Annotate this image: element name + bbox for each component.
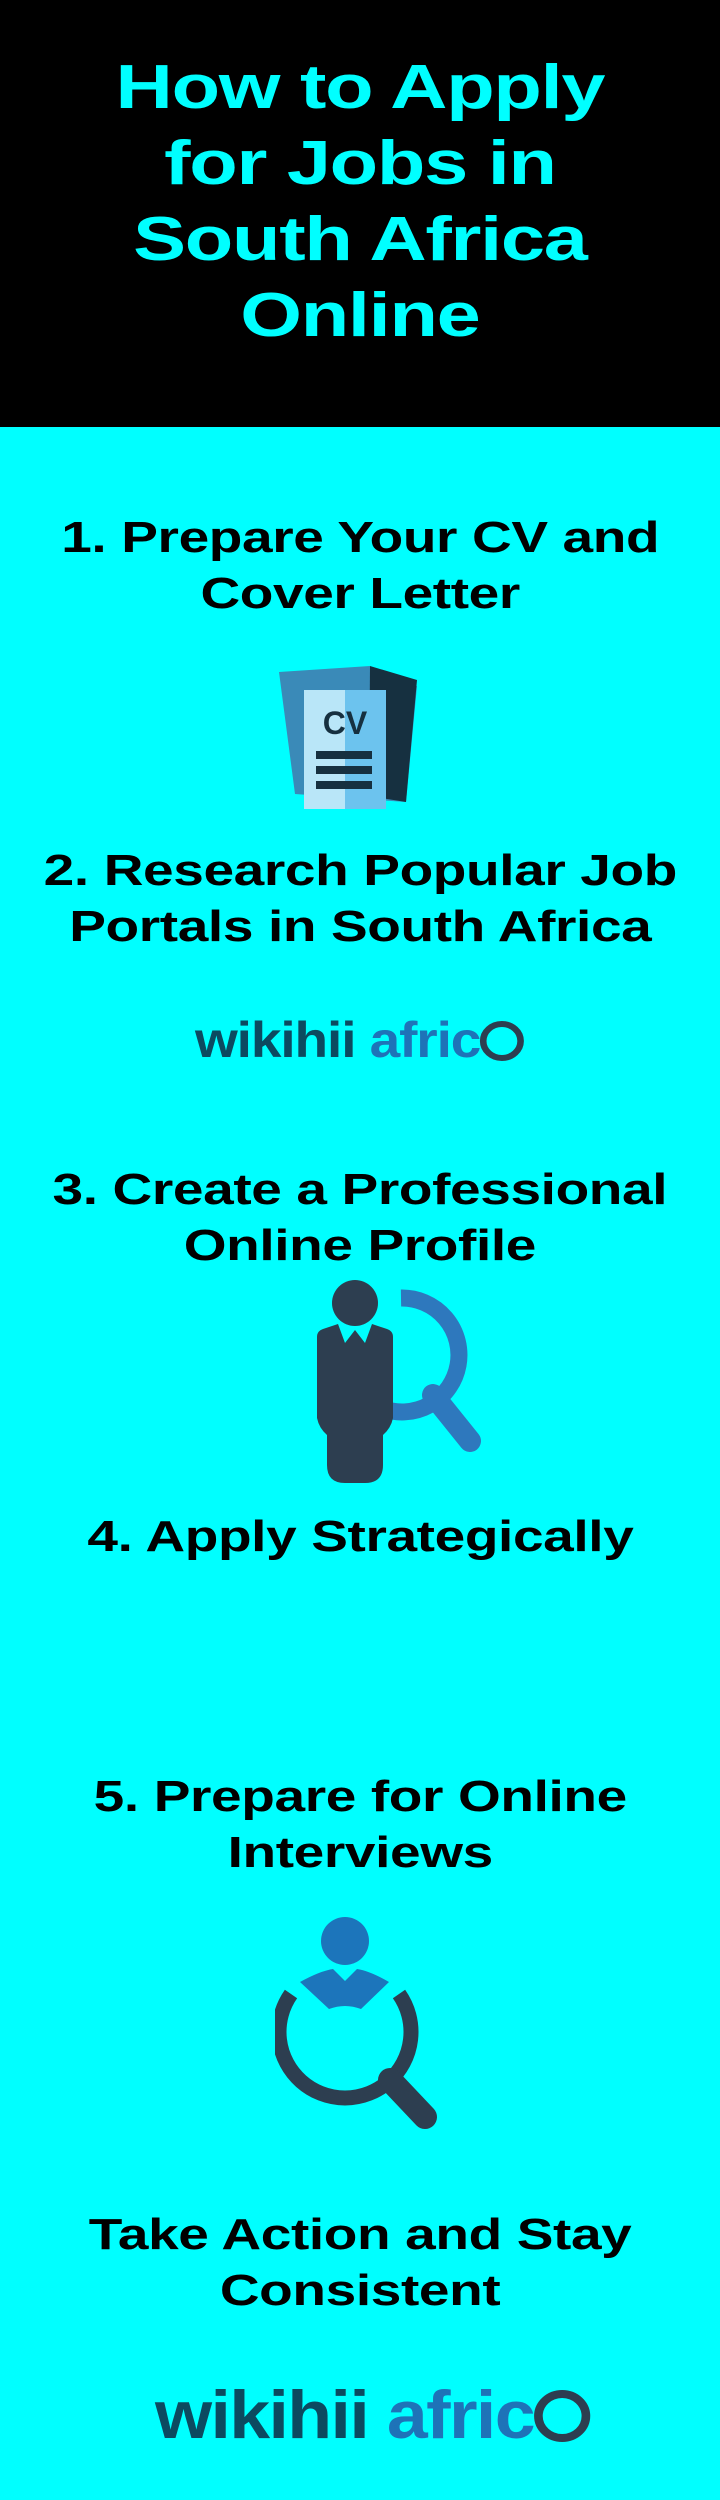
header panel xyxy=(0,0,720,427)
closing heading xyxy=(89,2210,632,2315)
heading 4: 4. Apply Strategically xyxy=(87,1512,633,1561)
closing heading: Consistent xyxy=(220,2266,500,2315)
title: for Jobs in xyxy=(164,129,556,198)
heading 1: Cover Letter xyxy=(200,569,520,618)
heading 5: 5. Prepare for Online xyxy=(93,1772,627,1821)
logo: wikihii africa bottom: wikihii afric xyxy=(155,2377,534,2453)
logo: wikihii africa small: wikihii afric xyxy=(195,1012,480,1068)
icon: professional with magnifier xyxy=(317,1280,481,1483)
icon: CV document xyxy=(279,666,417,809)
title: Online xyxy=(240,281,480,350)
title: South Africa xyxy=(133,205,587,274)
title xyxy=(116,53,605,350)
icon: CV document: CV xyxy=(323,705,368,741)
heading 2 xyxy=(43,846,677,951)
heading 3: Online Profile xyxy=(184,1221,536,1270)
heading 3 xyxy=(53,1165,667,1270)
title: How to Apply xyxy=(116,53,604,122)
heading 5: Interviews xyxy=(227,1828,493,1877)
heading 1: 1. Prepare Your CV and xyxy=(61,513,659,562)
closing heading: Take Action and Stay xyxy=(89,2210,631,2259)
heading 5 xyxy=(93,1772,627,1877)
icon: candidate search xyxy=(275,1917,437,2129)
heading 2: Portals in South Africa xyxy=(69,902,651,951)
heading 3: 3. Create a Professional xyxy=(53,1165,667,1214)
heading 1 xyxy=(61,513,659,618)
heading 2: 2. Research Popular Job xyxy=(43,846,677,895)
